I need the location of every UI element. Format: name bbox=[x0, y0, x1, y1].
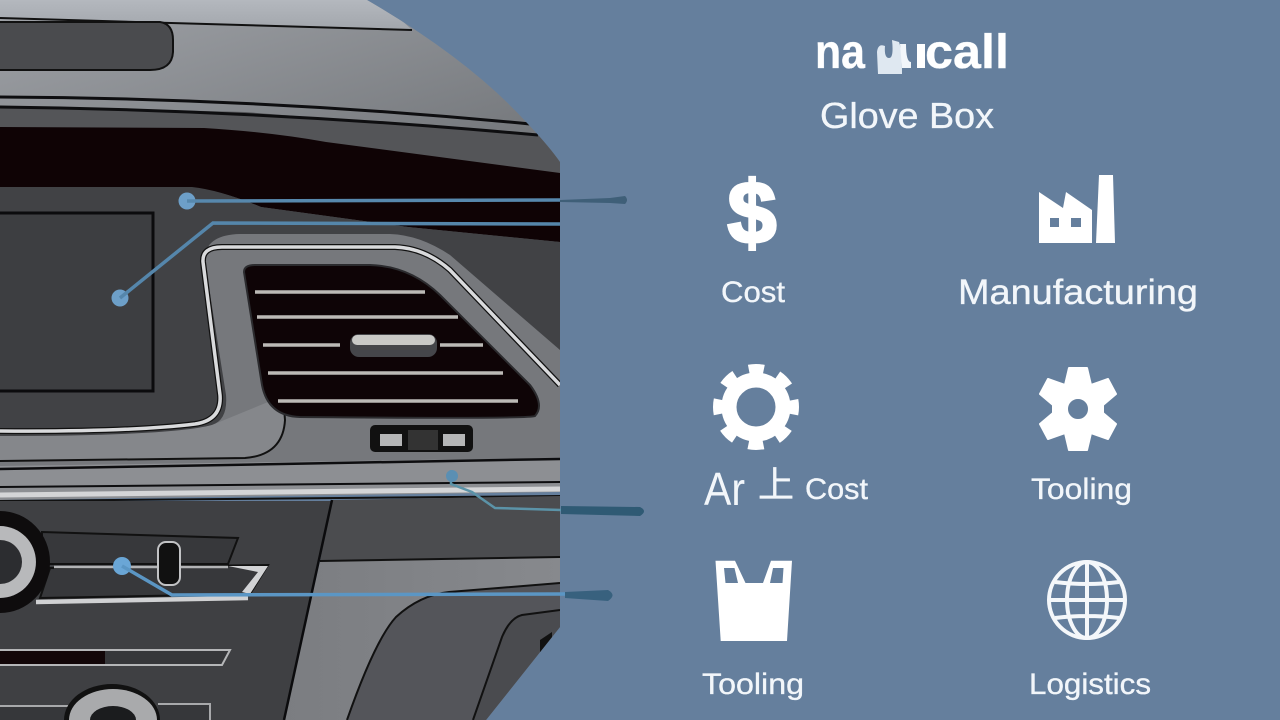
trim strip bbox=[0, 458, 560, 500]
dark upper band bbox=[0, 106, 560, 250]
leader line 4 bbox=[113, 557, 612, 601]
lower dark cover bbox=[347, 583, 560, 720]
vent slats bbox=[255, 292, 518, 401]
label: tooling left: Tooling bbox=[702, 668, 804, 701]
recessed display bbox=[0, 22, 173, 70]
chrome bezel bbox=[0, 247, 560, 431]
label: air cost: Cost bbox=[805, 473, 869, 506]
leader line 2 bbox=[112, 223, 560, 306]
vent handle bbox=[350, 334, 437, 357]
label: air cost: Ar bbox=[704, 463, 745, 515]
icon: globe bbox=[1049, 562, 1125, 638]
air vent bbox=[244, 265, 539, 418]
logo wordmark: call bbox=[925, 26, 1009, 79]
screen bbox=[0, 213, 153, 391]
icon: gear eight teeth bbox=[718, 369, 794, 445]
light grey lower panel bbox=[284, 557, 560, 720]
lower slot bbox=[0, 650, 230, 665]
panel: dashboard illustration bbox=[0, 0, 560, 720]
upper dash surface bbox=[0, 0, 560, 170]
left knob bbox=[0, 511, 50, 613]
centre stack bbox=[0, 501, 332, 720]
icon: gear six teeth bbox=[1040, 368, 1116, 450]
icon: bag bbox=[716, 561, 792, 641]
label: air cost: 上 bbox=[758, 464, 794, 505]
radio slots bbox=[42, 532, 238, 564]
capsule button bbox=[158, 542, 180, 585]
centre fascia bbox=[0, 187, 560, 436]
switch bbox=[370, 425, 473, 452]
lower knob bbox=[0, 684, 210, 720]
label: cost: Cost bbox=[721, 276, 786, 309]
label: logistics: Logistics bbox=[1029, 668, 1151, 701]
left grey band bbox=[0, 402, 284, 460]
label: manufacturing: Manufacturing bbox=[958, 273, 1198, 312]
leader line 1 bbox=[178, 192, 627, 210]
right lower panel bbox=[320, 496, 560, 561]
icon: factory bbox=[1039, 175, 1115, 243]
lower grey surround bbox=[0, 234, 560, 468]
label: air cost bbox=[704, 463, 869, 515]
leader line 3 bbox=[446, 470, 644, 516]
icon: glove box logo mark bbox=[877, 40, 925, 74]
black shadow band bbox=[0, 127, 560, 242]
subtitle: Glove Box bbox=[820, 95, 994, 136]
icon: dollar sign: $ bbox=[728, 163, 776, 262]
logo wordmark: na bbox=[815, 26, 865, 79]
logo wordmark bbox=[815, 26, 1009, 79]
label: tooling right: Tooling bbox=[1031, 473, 1132, 506]
top trim bbox=[0, 0, 412, 30]
